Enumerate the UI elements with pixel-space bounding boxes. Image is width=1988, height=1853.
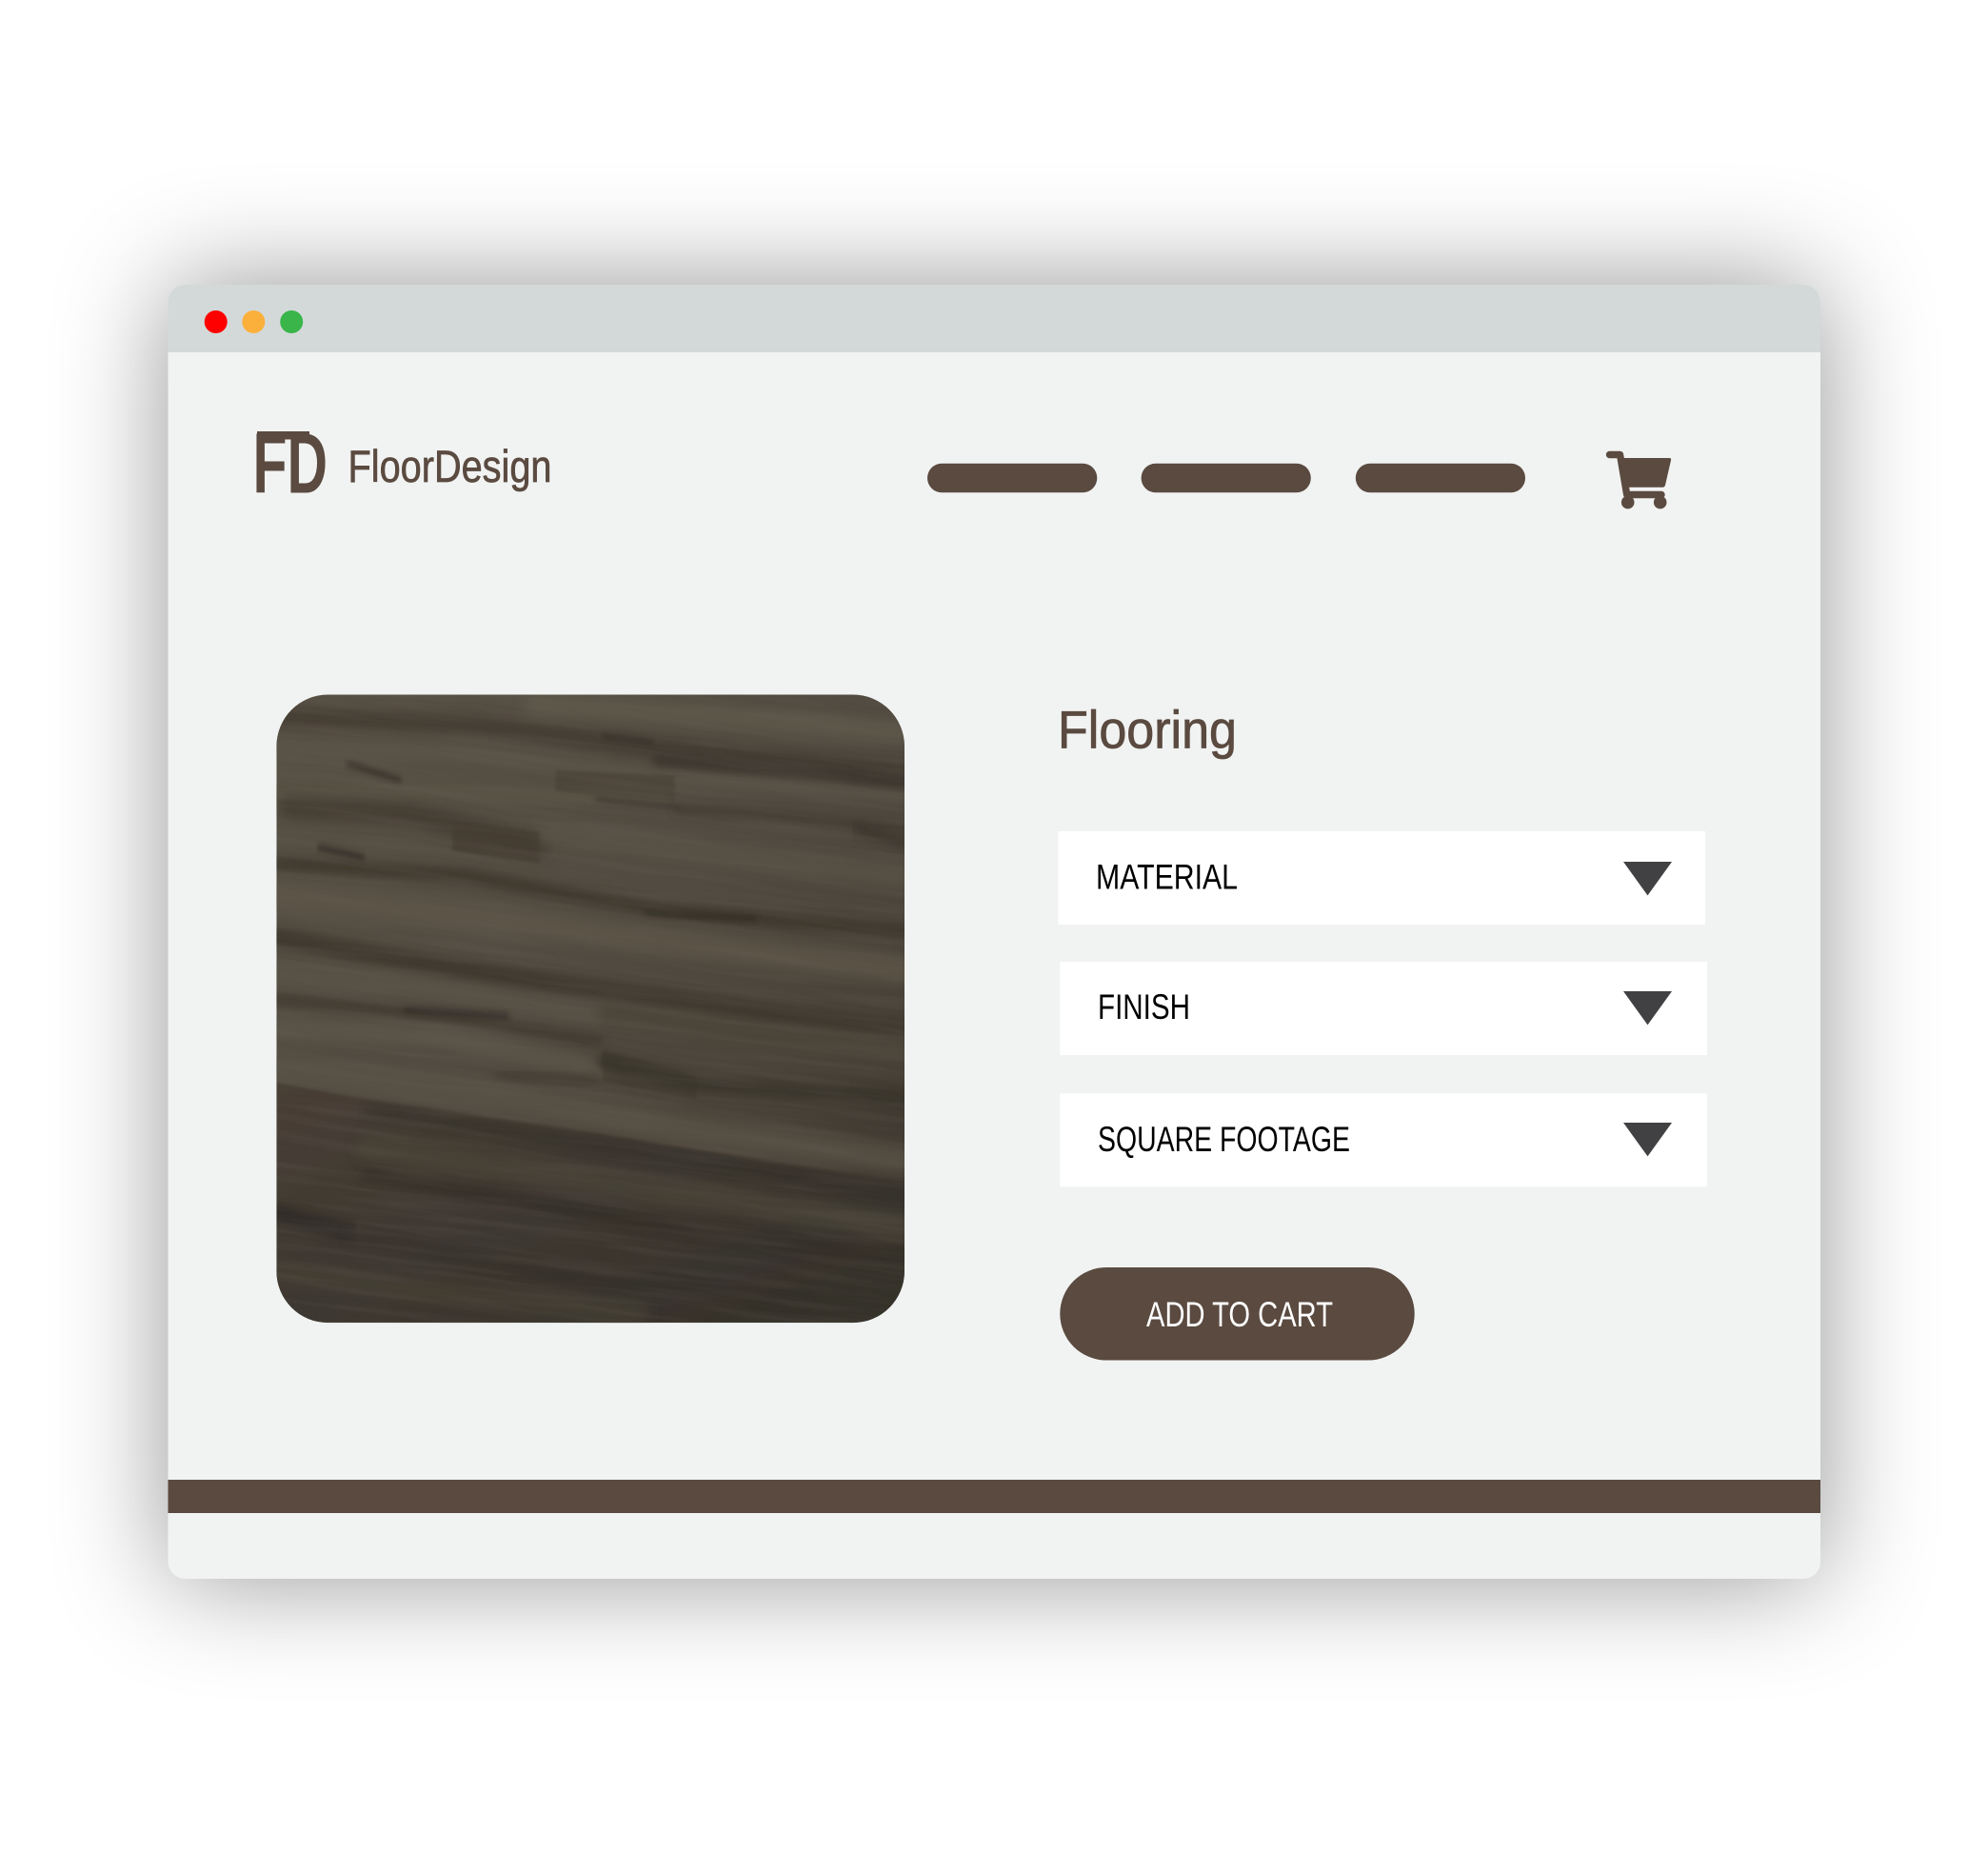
- dropdown: square footage: SQUARE FOOTAGE: [1098, 1120, 1350, 1159]
- lower board: [276, 1083, 905, 1323]
- middle boards: [276, 863, 905, 931]
- dropdown: material: [1059, 831, 1705, 925]
- dropdown: material: MATERIAL: [1096, 857, 1238, 897]
- logo: [253, 417, 552, 512]
- dropdown: square footage: [1060, 1093, 1707, 1186]
- add to cart button: [1060, 1267, 1415, 1360]
- window body: [168, 352, 179, 1577]
- dropdown: finish: FINISH: [1098, 987, 1190, 1026]
- window control dots: [205, 310, 303, 333]
- navigation placeholder pills: [927, 464, 1525, 492]
- logo wordmark: FloorDesign: [348, 442, 552, 492]
- logo monogram: [253, 417, 328, 512]
- upper boards: [276, 716, 905, 774]
- browser window: [168, 285, 1820, 1579]
- wood grain: [310, 1223, 905, 1324]
- icon: shopping cart: [1609, 455, 1671, 508]
- footer bar: [168, 1480, 1820, 1513]
- title bar: [168, 285, 1820, 352]
- knots and streaks: [349, 764, 399, 780]
- logo monogram: FD: [253, 417, 328, 512]
- browser window shadow: [168, 285, 1820, 1579]
- heading: Flooring: [1058, 700, 1237, 760]
- plank end seams: [453, 832, 538, 861]
- add to cart button: ADD TO CART: [1146, 1295, 1333, 1334]
- mockup artwork: [168, 285, 1820, 1577]
- dropdown: finish: [1060, 962, 1707, 1055]
- wood flooring photo: [276, 695, 905, 1324]
